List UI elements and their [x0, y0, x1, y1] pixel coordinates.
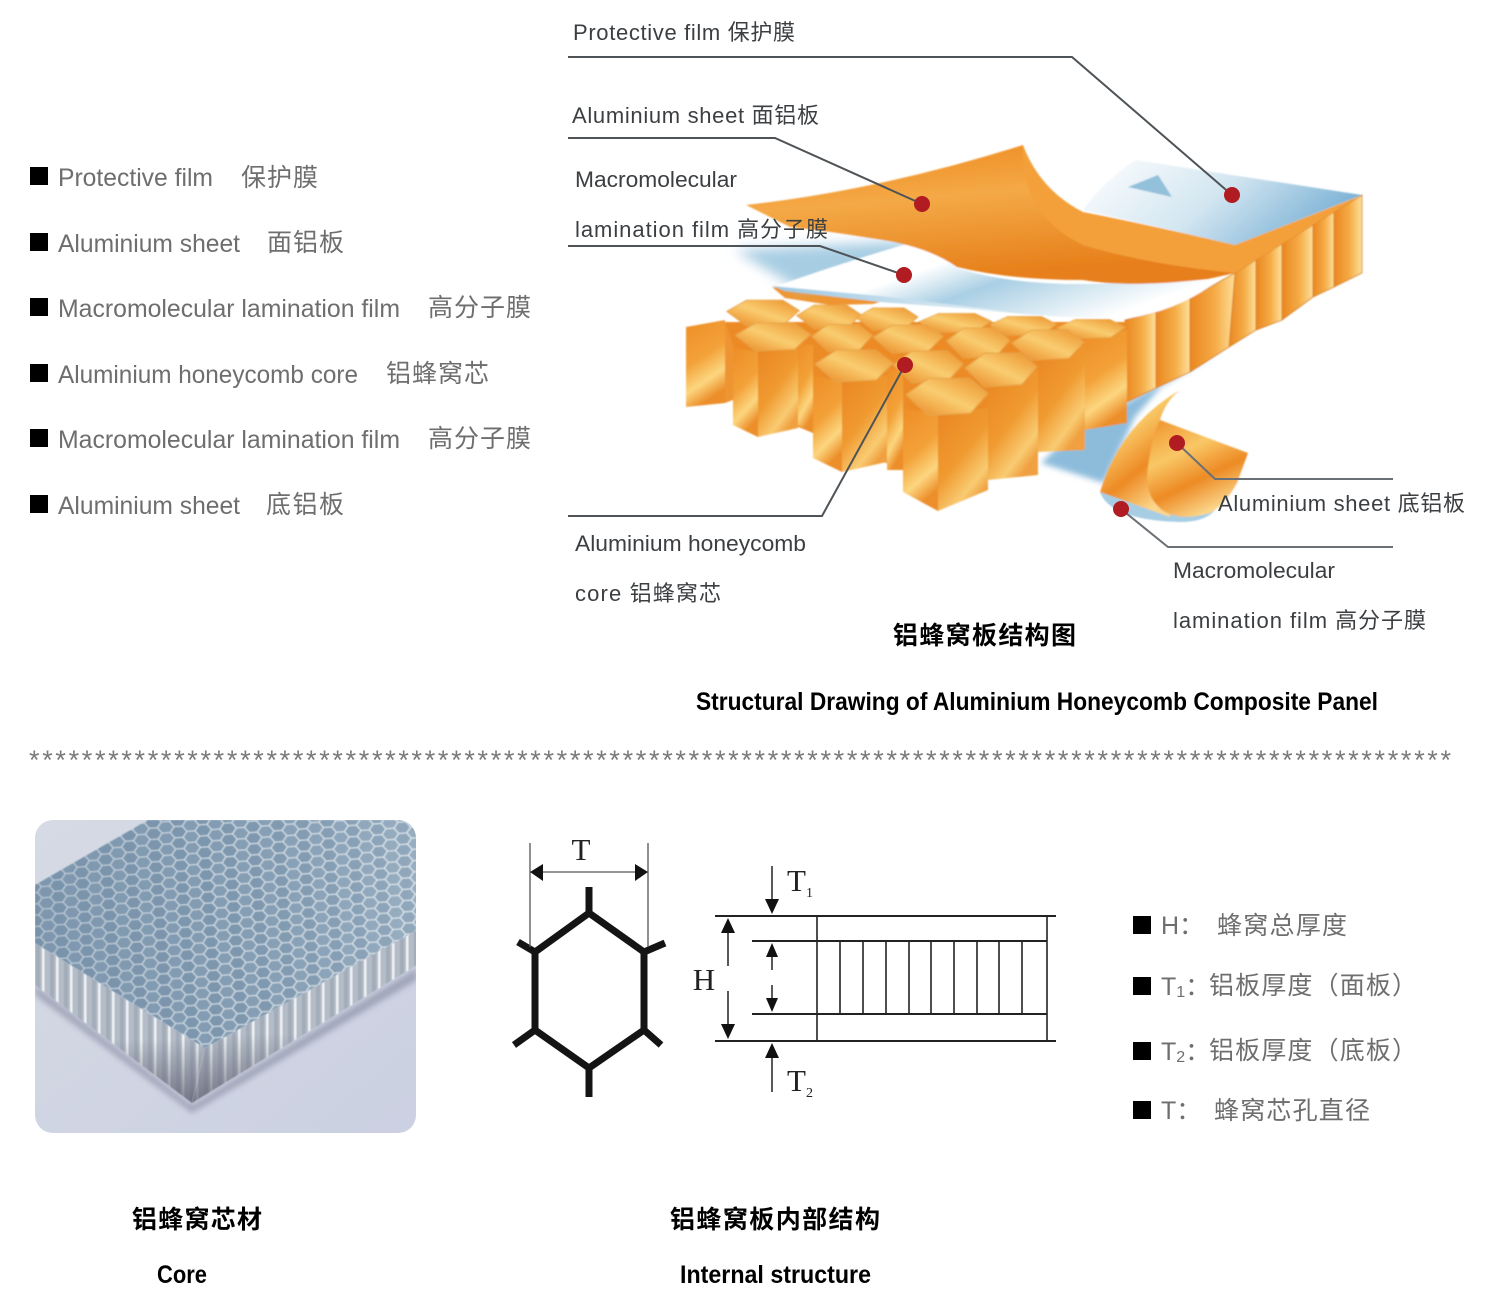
rear honeycomb edge ribs	[1125, 195, 1362, 403]
legend: T1: T	[1161, 973, 1176, 1001]
legend: T1: 铝板厚度（面板）	[1209, 972, 1417, 1000]
label: lamination film: lamination film 高分子膜	[575, 217, 828, 242]
label: bottom macromolecular: Macromolecular	[1173, 558, 1335, 583]
legend: T2: T	[1161, 1038, 1176, 1066]
dimension H	[693, 918, 735, 1039]
legend: H	[1133, 912, 1347, 940]
legend item: aluminium honeycomb core: 铝蜂窝芯	[386, 360, 489, 388]
dimension T2: T	[787, 1063, 806, 1098]
legend: T2: 2	[1176, 1049, 1185, 1066]
legend item: aluminium sheet bottom: Aluminium sheet	[58, 492, 240, 520]
legend item: aluminium honeycomb core	[30, 360, 489, 389]
cell wall stubs	[514, 887, 665, 1097]
leader: honeycomb core	[568, 365, 905, 516]
legend item: aluminium sheet: Aluminium sheet	[58, 230, 240, 258]
legend: T: T：	[1161, 1097, 1201, 1125]
legend: T1: ：	[1185, 973, 1210, 1001]
legend: T1: 1	[1176, 984, 1185, 1001]
label: bottom aluminium sheet: Aluminium sheet 底铝板	[1218, 491, 1465, 516]
legend item: macromolecular lamination film 2: Macromolecular lamination film	[58, 426, 400, 454]
dimension T2	[765, 1043, 813, 1101]
legend item: protective film: Protective film	[58, 164, 213, 192]
dimension T1: T	[787, 863, 806, 898]
asterisk divider: ************************************************************************************************************	[29, 745, 1451, 775]
internal structure caption english: Internal structure	[680, 1261, 871, 1289]
core underside strip	[772, 287, 880, 305]
legend item: aluminium sheet	[30, 229, 344, 258]
legend item: macromolecular lamination film	[30, 294, 531, 323]
legend item: protective film	[30, 164, 318, 192]
wall connector	[725, 322, 733, 403]
leader: bottom aluminium sheet	[1177, 443, 1393, 479]
dimension legend	[1133, 912, 1417, 1125]
top aluminium sheet	[746, 145, 1235, 284]
label: protective film: Protective film 保护膜	[573, 20, 795, 45]
label: core: core 铝蜂窝芯	[575, 581, 721, 606]
lamination film	[774, 240, 1219, 318]
dimension T2: 2	[806, 1086, 813, 1101]
honeycomb top surface	[35, 820, 417, 1048]
legend item: aluminium sheet: 面铝板	[267, 229, 344, 257]
legend item: macromolecular lamination film 2: 高分子膜	[428, 425, 531, 453]
leader: lamination film	[568, 246, 904, 275]
legend item: aluminium sheet bottom: 底铝板	[266, 491, 344, 519]
honeycomb core	[686, 300, 1127, 511]
leader: protective film	[568, 57, 1232, 195]
column A	[733, 345, 798, 437]
legend item: macromolecular lamination film: 高分子膜	[428, 294, 531, 322]
core height arrows	[766, 943, 778, 1012]
protective film	[1083, 160, 1362, 245]
core photo	[35, 820, 417, 1133]
legend item: macromolecular lamination film 2	[30, 425, 531, 454]
cell tops	[727, 300, 799, 326]
core caption english: Core	[157, 1261, 207, 1289]
column F	[1085, 330, 1127, 430]
legend: T2: 铝板厚度（底板）	[1209, 1037, 1417, 1065]
callout labels	[572, 20, 1465, 633]
protective film fold	[1128, 175, 1172, 197]
structure caption chinese: 铝蜂窝板结构图	[893, 621, 1076, 650]
honeycomb right wall	[192, 930, 417, 1103]
width dimension T: T	[572, 832, 591, 867]
column D	[988, 370, 1038, 480]
dimension T1	[765, 863, 813, 914]
legend: H: 蜂窝总厚度	[1217, 912, 1347, 940]
curled bottom aluminium front	[1147, 420, 1248, 517]
label: aluminium sheet: Aluminium sheet 面铝板	[572, 103, 819, 128]
column E	[1038, 345, 1085, 452]
internal structure caption chinese: 铝蜂窝板内部结构	[670, 1205, 880, 1234]
lamination film lower rim	[772, 286, 1013, 312]
structure caption english: Structural Drawing of Aluminium Honeycomb Composite Panel	[696, 688, 1378, 716]
sandwich section diagram	[693, 863, 1056, 1101]
label: macromolecular: Macromolecular	[575, 167, 737, 192]
legend item: aluminium sheet bottom	[30, 491, 344, 520]
legend: T2: ：	[1185, 1038, 1210, 1066]
top sheet underside curve	[1023, 145, 1360, 273]
photo shadow	[35, 968, 417, 1113]
legend item: macromolecular lamination film: Macromolecular lamination film	[58, 295, 400, 323]
hexagon cell	[535, 913, 644, 1068]
legend: T: 蜂窝芯孔直径	[1214, 1097, 1370, 1125]
hexagon cell diagram	[514, 832, 665, 1097]
dimension H: H	[693, 962, 715, 997]
core body	[725, 322, 1127, 470]
width dimension T	[530, 832, 648, 947]
label: aluminium honeycomb: Aluminium honeycomb	[575, 531, 806, 556]
column B	[813, 375, 887, 472]
column gaps	[798, 345, 813, 433]
curled bottom film	[1100, 480, 1215, 522]
label: bottom lamination film: lamination film 高分子膜	[1173, 608, 1426, 633]
legend item: protective film: 保护膜	[241, 164, 318, 192]
marker dots	[896, 187, 1240, 517]
leader: aluminium sheet	[568, 138, 922, 204]
skins and core lines	[715, 916, 1056, 1041]
legend: H: H：	[1161, 912, 1204, 940]
dimension T1: 1	[806, 886, 813, 901]
legend item: aluminium honeycomb core: Aluminium honeycomb core	[58, 361, 358, 389]
core caption chinese: 铝蜂窝芯材	[132, 1205, 262, 1234]
left wall	[686, 320, 725, 407]
leader: bottom lamination film	[1121, 509, 1393, 547]
curled bottom aluminium sheet	[1100, 390, 1180, 517]
layer legend	[30, 164, 531, 520]
lamination film fade	[735, 240, 921, 290]
core verticals	[817, 916, 1047, 1041]
lower blue backing	[1041, 347, 1229, 483]
honeycomb left wall	[35, 943, 205, 1103]
exploded honeycomb panel illustration	[686, 145, 1362, 522]
leader lines and markers	[568, 57, 1393, 547]
column C	[903, 408, 988, 511]
legend: T	[1133, 1097, 1370, 1125]
